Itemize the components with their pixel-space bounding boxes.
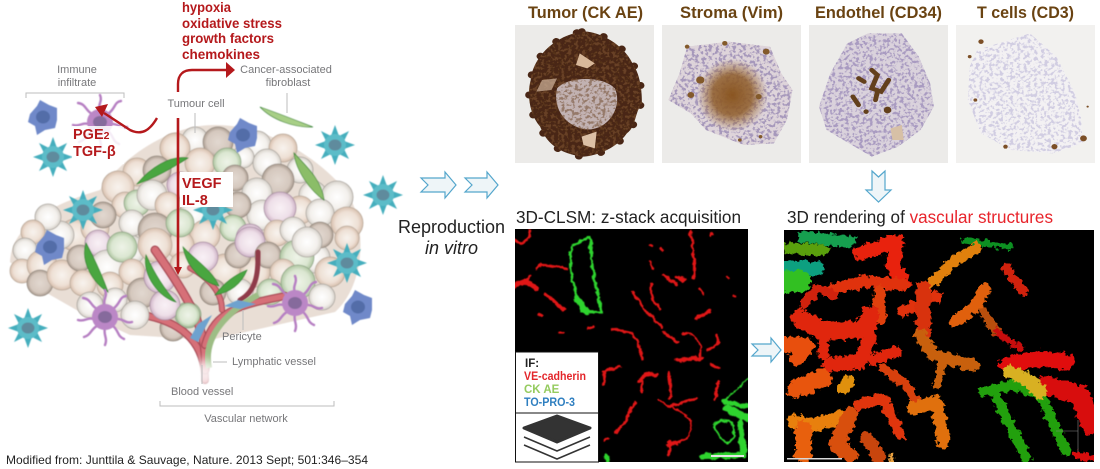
PGE2 label background [72,126,124,164]
label leader lines and brackets [26,93,334,406]
heading: 3D rendering: 3D rendering of vascular structures [787,207,1053,227]
immune cells: blue [28,100,372,325]
reproduction in vitro label [398,217,505,258]
legend box [515,352,599,462]
tumour cell mass [10,127,363,341]
illustration labels: Tumour cell [167,98,225,110]
legend text: TO-PRO-3 [524,397,575,409]
red annotation list: oxidative stress [182,15,282,31]
illustration labels: Cancer-associated [240,64,332,76]
legend text: CK AE [524,384,560,396]
vessel base fade [189,360,219,388]
reproduction in vitro label: in vitro [425,238,478,258]
axis box [1056,420,1078,452]
panel: 3D rendering of vascular structures [784,230,1094,462]
heading: Stroma (Vim) [680,4,783,22]
arrow: tumour cell to fibroblast [178,62,235,92]
panel: endothel CD34 [809,4,948,163]
heading: Endothel (CD34) [815,4,942,22]
illustration labels: fibroblast [266,77,310,89]
PGE2 and TGF-beta label: PGE2 [73,127,110,143]
illustration labels: Pericyte [222,331,262,343]
immune cells: purple [73,95,322,345]
illustration labels [57,64,332,425]
icon: layered stack [524,416,590,459]
VEGF and IL-8 label: IL-8 [182,193,208,209]
arrow: to rendering [752,338,781,362]
illustration labels: Blood vessel [171,386,233,398]
white label background [180,172,233,207]
illustration labels: Lymphatic vessel [232,356,316,368]
legend text: IF: [525,358,539,370]
pericytes [190,300,256,342]
arrow: tumour cell to vessels [174,118,182,275]
panel: tumor CK AE [515,4,654,163]
scale bar [787,458,842,460]
panel: T cells CD3 [956,4,1095,163]
PGE2 and TGF-beta label [73,127,116,160]
illustration labels: Immune [57,64,97,76]
red annotation list: chemokines [182,46,260,62]
tumour cell mass backing [10,125,361,340]
heading: z-stack acquisition: 3D-CLSM: z-stack acquisition [516,207,741,227]
VEGF and IL-8 label [182,176,222,209]
panel: stroma Vim [662,4,801,163]
legend text: VE-cadherin [524,371,586,383]
panel: confocal z-stack image [515,229,748,462]
rendered vessels [785,237,1093,462]
fibroblasts [85,107,324,302]
arrow: tumour cell to immune infiltrate [95,104,157,132]
PGE2 and TGF-beta label: TGF-β [73,144,116,160]
immunofluorescence signals [515,230,748,460]
legend text [524,358,586,409]
illustration labels: Vascular network [204,413,288,425]
foreground cells [121,290,200,329]
arrow: down to rendering [866,171,891,202]
citation: Modified from: Junttila & Sauvage, Nature. 2013 Sept; 501:346–354 [6,453,368,467]
red annotation list [182,0,282,62]
blood vessels [148,250,285,380]
heading: Tumor (CK AE) [528,4,643,22]
immune cells: teal [8,125,403,348]
lymphatic vessel [208,295,258,368]
VEGF and IL-8 label: VEGF [182,176,222,192]
illustration labels: infiltrate [58,77,96,89]
scale bar [711,455,744,457]
reproduction in vitro label: Reproduction [398,217,505,237]
red annotation list: growth factors [182,30,274,46]
heading: T cells (CD3) [977,4,1074,22]
panel: tumour microenvironment illustration [8,64,403,425]
arrows to in vitro [421,172,498,198]
